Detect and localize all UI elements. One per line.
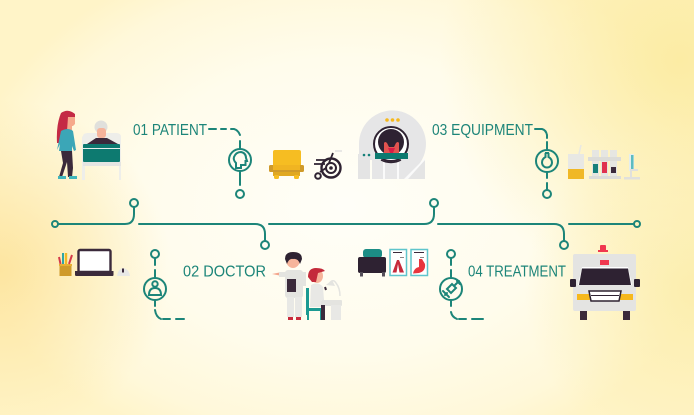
illustration: ambulance bbox=[570, 245, 640, 320]
illustration: MRI scanner bbox=[358, 110, 426, 179]
illustration: armchair bbox=[269, 150, 304, 179]
connector: doctor bbox=[151, 250, 184, 319]
icon: flask bbox=[536, 150, 558, 172]
panel: 01 patient bbox=[57, 111, 251, 198]
panel: 03 equipment bbox=[432, 122, 640, 198]
illustration: hospital bed bbox=[358, 249, 386, 276]
illustration: woman visiting patient in bed bbox=[57, 111, 121, 180]
heading: 04 treatment: 04 TREATMENT bbox=[468, 264, 566, 280]
connector: treatment bbox=[447, 250, 483, 319]
heading: 02 doctor: 02 DOCTOR bbox=[183, 264, 266, 280]
infographic content bbox=[52, 110, 640, 320]
icon: head bbox=[229, 149, 251, 171]
timeline bbox=[52, 199, 640, 249]
illustration: x-ray stomach bbox=[411, 250, 428, 276]
icon: doctor badge bbox=[144, 278, 166, 300]
illustration: beaker bbox=[568, 145, 584, 179]
illustration: test tube rack bbox=[588, 150, 621, 179]
illustration: wheelchair bbox=[314, 151, 342, 179]
heading: 03 equipment: 03 EQUIPMENT bbox=[432, 122, 533, 139]
illustration: pencil cup, laptop and mouse bbox=[59, 250, 130, 276]
panel: 02 doctor bbox=[144, 250, 266, 319]
heading: 01 patient: 01 PATIENT bbox=[133, 122, 207, 139]
connector: patient bbox=[209, 129, 244, 198]
icon: syringe bbox=[440, 278, 462, 300]
panel: 04 treatment bbox=[440, 250, 566, 319]
illustration: x-ray lungs bbox=[390, 250, 406, 276]
connector: equipment bbox=[535, 129, 551, 198]
illustration: lab stand bbox=[624, 154, 640, 180]
illustration: two doctors at desk bbox=[272, 252, 342, 320]
